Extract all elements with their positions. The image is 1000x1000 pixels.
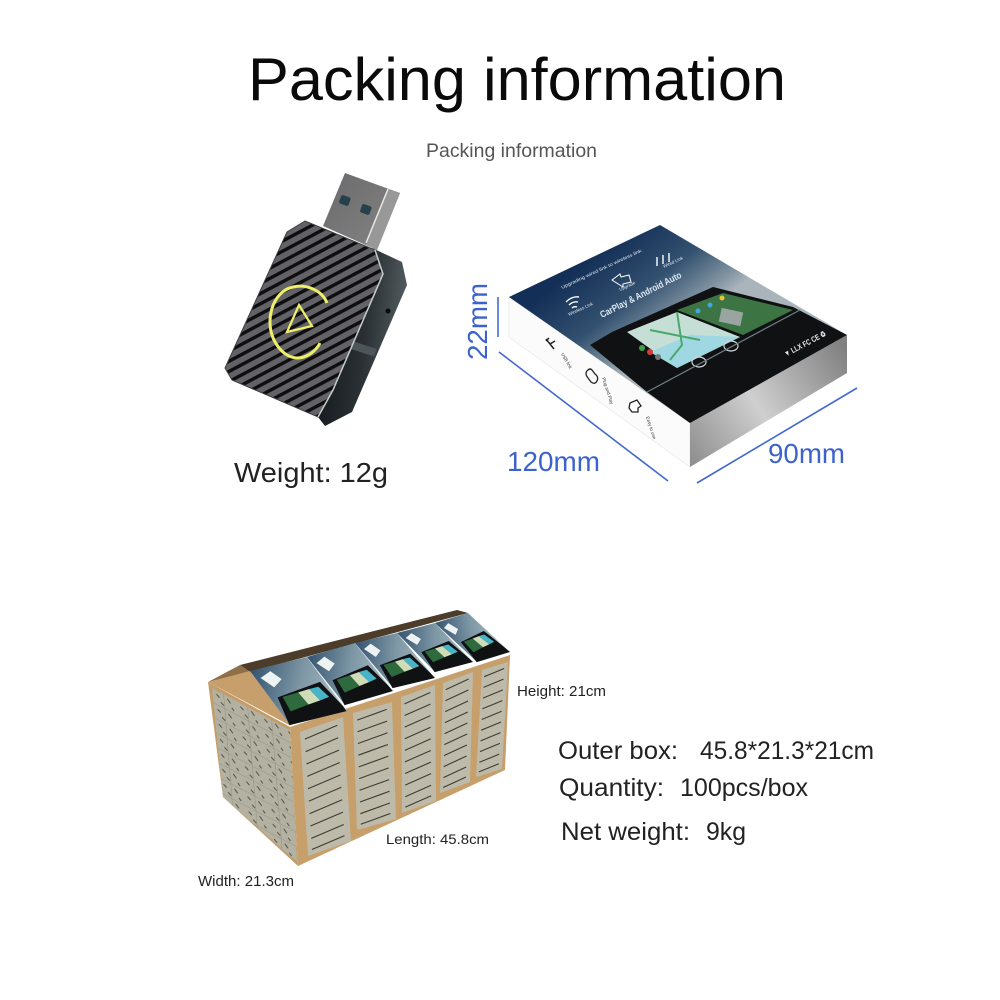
net weight specification bbox=[561, 818, 746, 846]
net weight specification: Net weight: bbox=[561, 818, 690, 846]
dark dashboard area bbox=[590, 287, 847, 423]
subtitle: Packing information bbox=[426, 140, 597, 162]
app icons bbox=[639, 345, 661, 360]
dimension label: 90mm: 90mm bbox=[768, 438, 845, 469]
left rear flap bbox=[208, 665, 250, 682]
side icon: easy to use bbox=[629, 400, 641, 412]
dongle metal side bbox=[318, 248, 407, 426]
product retail box bbox=[509, 225, 847, 467]
front tile column 5 bbox=[476, 662, 508, 777]
yellow logo triangle bbox=[287, 305, 312, 332]
yellow logo ring bbox=[270, 286, 327, 358]
USB plug bbox=[323, 173, 400, 250]
certification marks: ▼ LLX FC CE ♻ bbox=[783, 329, 828, 359]
dimension line: height bbox=[497, 297, 499, 337]
product image: USB dongle bbox=[225, 173, 407, 426]
roof product card 5 bbox=[435, 613, 510, 662]
carton width label: Width: 21.3cm bbox=[198, 874, 294, 890]
quantity specification bbox=[559, 774, 808, 802]
side caption: plug and play: Plug and Play bbox=[601, 377, 615, 405]
side icon: USB link bbox=[546, 338, 555, 349]
back dark flap bbox=[240, 610, 468, 672]
edge highlight bbox=[318, 250, 383, 417]
outer box specification: 45.8*21.3*21cm bbox=[700, 737, 874, 765]
dimension label: 22mm: 22mm bbox=[462, 283, 493, 360]
dimension line: width bbox=[697, 388, 857, 483]
upgrade icon bbox=[612, 274, 631, 287]
dials bbox=[692, 341, 738, 367]
net weight specification: 9kg bbox=[706, 818, 746, 846]
front tile column 1 bbox=[300, 717, 351, 856]
dashboard trim line bbox=[647, 310, 800, 392]
top face tagline: Upgrading wired link to wireless link bbox=[560, 248, 643, 290]
car screen map bbox=[627, 312, 740, 368]
car screen green panel bbox=[677, 293, 793, 335]
carbon fibre face bbox=[225, 221, 383, 417]
wired link caption: Wired Link bbox=[662, 255, 684, 269]
box top face bbox=[509, 225, 847, 423]
front carton face bbox=[290, 655, 510, 866]
left carton face bbox=[208, 682, 298, 866]
roof product card 4 bbox=[397, 623, 473, 672]
quantity specification: 100pcs/box bbox=[680, 774, 808, 802]
outer box specification: Outer box: bbox=[558, 737, 678, 765]
left triangular flap bbox=[208, 671, 291, 726]
title: Packing information bbox=[248, 46, 786, 113]
dimension label: 120mm: 120mm bbox=[507, 446, 600, 477]
carton height label: Height: 21cm bbox=[517, 684, 606, 700]
side caption: easy to use: Easy to use bbox=[645, 416, 657, 440]
front tile column 4 bbox=[440, 672, 473, 793]
side caption: USB link: USB link bbox=[560, 352, 573, 370]
upgrade caption: Upgrade bbox=[618, 280, 637, 292]
box left side bbox=[509, 297, 690, 467]
roof product card 3 bbox=[355, 633, 435, 688]
front tile column 2 bbox=[353, 702, 396, 830]
front tile column 3 bbox=[401, 685, 436, 813]
weight label: Weight: 12g bbox=[234, 457, 388, 488]
wifi icon bbox=[566, 297, 579, 308]
side icon: plug and play bbox=[586, 369, 598, 383]
carton length label: Length: 45.8cm bbox=[386, 831, 489, 847]
wireless link caption: Wireless Link bbox=[567, 301, 594, 317]
outer carton bbox=[208, 610, 510, 866]
roof product card 1 bbox=[249, 657, 348, 725]
outer box specification bbox=[558, 737, 874, 765]
box right side bbox=[690, 335, 847, 467]
top face product name: CarPlay & Android Auto bbox=[598, 270, 684, 321]
quantity specification: Quantity: bbox=[559, 774, 664, 802]
dimension line: length bbox=[499, 352, 668, 481]
wired link icon bbox=[657, 253, 669, 266]
roof product card 2 bbox=[307, 643, 393, 705]
